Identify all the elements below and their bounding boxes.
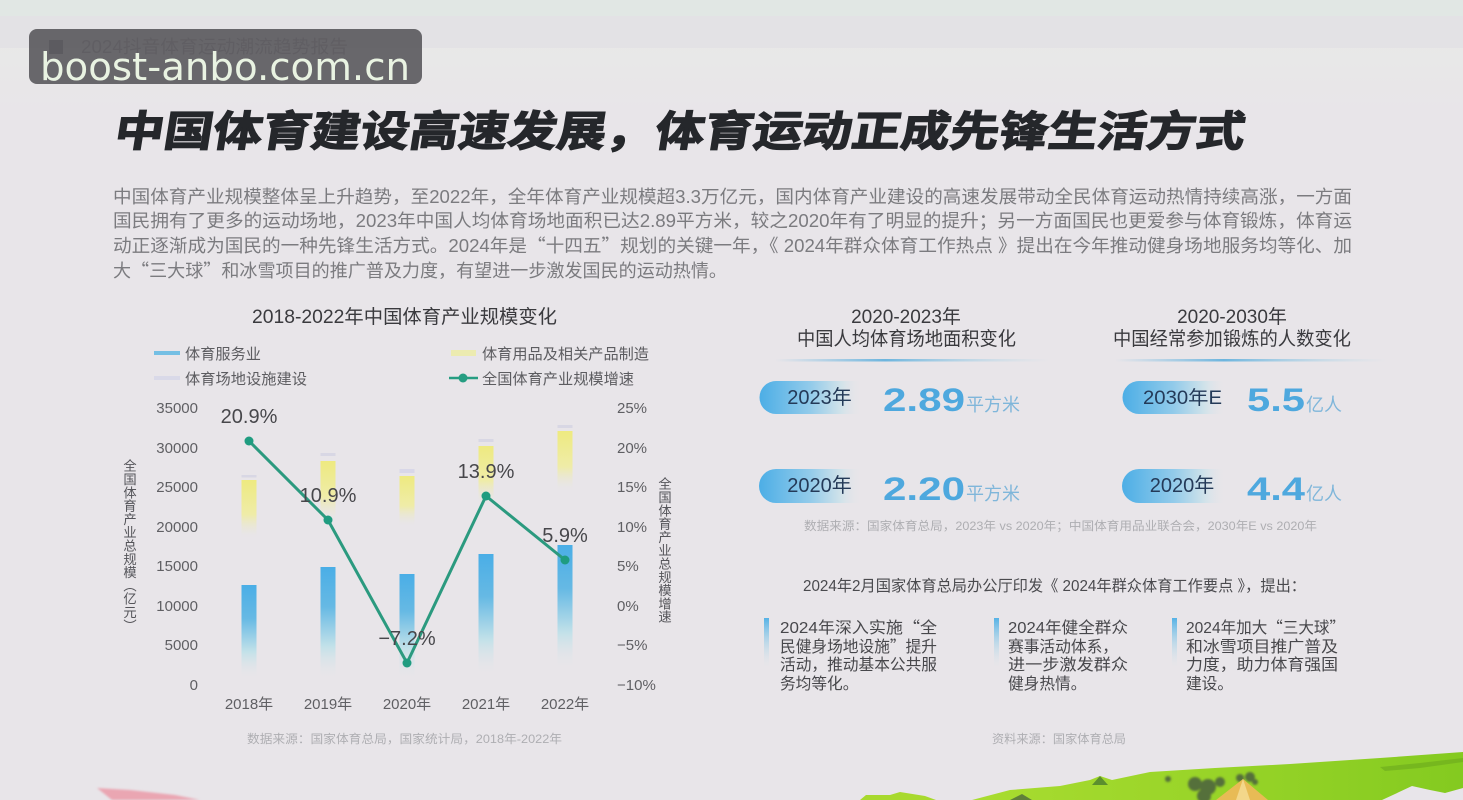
2020 row: 2020年	[787, 474, 852, 497]
left axis labels: 25000	[156, 479, 198, 496]
title: 中国体育建设高速发展，体育运动正成先锋生活方式	[111, 98, 1251, 159]
2020 row: 2020年	[1150, 474, 1214, 497]
stacked bars	[242, 425, 572, 680]
2020 row	[759, 469, 1020, 507]
policy item 2: 赛事活动体系，	[1008, 637, 1118, 656]
year labels: 2018年	[225, 696, 273, 713]
policy item 2: 进一步激发群众	[1008, 656, 1128, 674]
illustration: pink flag corner	[97, 788, 200, 800]
left axis labels: 5000	[165, 637, 198, 654]
2020 row: 亿人	[1306, 484, 1342, 504]
2030 row: 亿人	[1306, 395, 1342, 415]
policy item 1: 务均等化。	[780, 675, 858, 693]
intro paragraph: 动正逐渐成为国民的一种先锋生活方式。2024年是 “十四五”规划的关键一年，《 2024年群众体育工作热点 》提出在今年推动健身场地服务均等化、加	[113, 232, 1352, 258]
left axis labels: 30000	[156, 440, 198, 457]
policy item 3: 2024年加大“三大球”	[1186, 615, 1345, 638]
right axis labels: 0%	[617, 598, 639, 615]
report header label: 2024抖音体育运动潮流趋势报告	[81, 37, 348, 57]
policy item 1: 民健身场地设施”提升	[780, 634, 937, 657]
right axis labels: 5%	[617, 558, 639, 575]
2023 row: 2023年	[787, 386, 852, 409]
stats source: 数据来源：国家体育总局，2023年 vs 2020年；中国体育用品业联合会，2030年E vs 2020年	[804, 518, 1317, 533]
heading: 2020-2030年	[1177, 306, 1287, 328]
policy source: 资料来源：国家体育总局	[992, 731, 1126, 746]
intro paragraph	[113, 187, 1352, 283]
watermark: boost-anbo.com.cn	[40, 45, 410, 89]
right axis labels: −10%	[617, 677, 656, 694]
2020 row	[1122, 469, 1342, 507]
right axis labels: −5%	[617, 637, 647, 654]
2020 row: 2.20	[883, 471, 965, 507]
year labels: 2022年	[541, 696, 589, 713]
policy item 1: 活动，推动基本公共服	[780, 656, 937, 674]
2030 row	[1122, 381, 1342, 418]
panel: sports industry scale chart	[120, 306, 674, 746]
chart legend: 体育场地设施建设	[185, 371, 307, 388]
growth rate labels	[221, 406, 588, 650]
growth rate labels: 10.9%	[300, 485, 357, 507]
policy item 3: 力度，助力体育强国	[1186, 656, 1338, 674]
policy item 2: 2024年健全群众	[1008, 619, 1128, 637]
chart legend: 全国体育产业规模增速	[482, 370, 634, 388]
year labels: 2019年	[304, 696, 352, 713]
growth rate labels: 5.9%	[542, 525, 588, 547]
panel: regular exercisers	[1113, 306, 1387, 507]
left axis labels: 20000	[156, 519, 198, 536]
right axis labels: 25%	[617, 400, 647, 417]
panel: regular exercisers: 中国经常参加锻炼的人数变化	[1113, 328, 1351, 350]
left axis labels: 10000	[156, 598, 198, 615]
year labels: 2021年	[462, 696, 510, 713]
panel: per-capita sports area	[759, 306, 1050, 507]
2030 row: 2030年E	[1143, 387, 1222, 409]
right axis title: 全国体育产业总规模增速	[656, 476, 674, 625]
intro paragraph: 中国体育产业规模整体呈上升趋势，至2022年，全年体育产业规模超3.3万亿元，国内体育产业建设的高速发展带动全民体育运动热情持续高涨，一方面	[113, 187, 1352, 207]
left axis labels	[156, 400, 198, 694]
growth rate line	[244, 436, 570, 668]
left axis labels: 35000	[156, 400, 198, 417]
chart legend: 体育服务业	[185, 346, 261, 363]
policy item 2: 健身热情。	[1008, 675, 1086, 693]
left axis labels: 15000	[156, 558, 198, 575]
2023 row: 平方米	[966, 395, 1020, 415]
policy item 3: 建设。	[1186, 675, 1233, 693]
policy item 1	[764, 615, 937, 693]
growth rate labels: −7.2%	[378, 628, 436, 650]
intro paragraph: 国民拥有了更多的运动场地，2023年中国人均体育场地面积已达2.89平方米，较之2020年有了明显的提升；另一方面国民也更爱参与体育锻炼，体育运	[113, 211, 1352, 231]
chart legend: 体育用品及相关产品制造	[482, 346, 649, 363]
2020 row: 平方米	[966, 484, 1020, 504]
left axis labels: 0	[190, 677, 198, 694]
year labels	[225, 696, 589, 713]
watermark	[29, 29, 422, 89]
2023 row	[760, 381, 1020, 418]
panel: per-capita sports area: 中国人均体育场地面积变化	[797, 328, 1016, 350]
right axis labels: 10%	[617, 519, 647, 536]
right axis labels: 15%	[617, 479, 647, 496]
policy heading: 2024年2月国家体育总局办公厅印发《 2024年群众体育工作要点 》，提出：	[803, 577, 1306, 595]
policy item 3	[1172, 615, 1345, 693]
chart heading: 2018-2022年中国体育产业规模变化	[252, 306, 557, 328]
policy item 1: 2024年深入实施 “全	[780, 615, 937, 638]
2020 row: 4.4	[1247, 471, 1305, 507]
left axis title: 全国体育产业总规模（亿元）	[120, 458, 140, 632]
right axis labels	[617, 400, 656, 694]
intro paragraph: 大“三大球”和冰雪项目的推广普及力度，有望进一步激发国民的运动热情。	[113, 257, 727, 283]
right axis labels: 20%	[617, 440, 647, 457]
chart source: 数据来源：国家体育总局，国家统计局，2018年-2022年	[247, 731, 562, 746]
heading: 2020-2023年	[851, 306, 961, 328]
policy item 2	[994, 618, 1128, 693]
growth rate labels: 13.9%	[458, 461, 515, 483]
2030 row: 5.5	[1247, 382, 1305, 418]
policy item 3: 和冰雪项目推广普及	[1186, 638, 1338, 656]
chart legend	[154, 346, 649, 388]
2023 row: 2.89	[883, 382, 965, 418]
year labels: 2020年	[383, 696, 431, 713]
illustration: green hill and tent	[860, 752, 1463, 800]
growth rate labels: 20.9%	[221, 406, 278, 428]
